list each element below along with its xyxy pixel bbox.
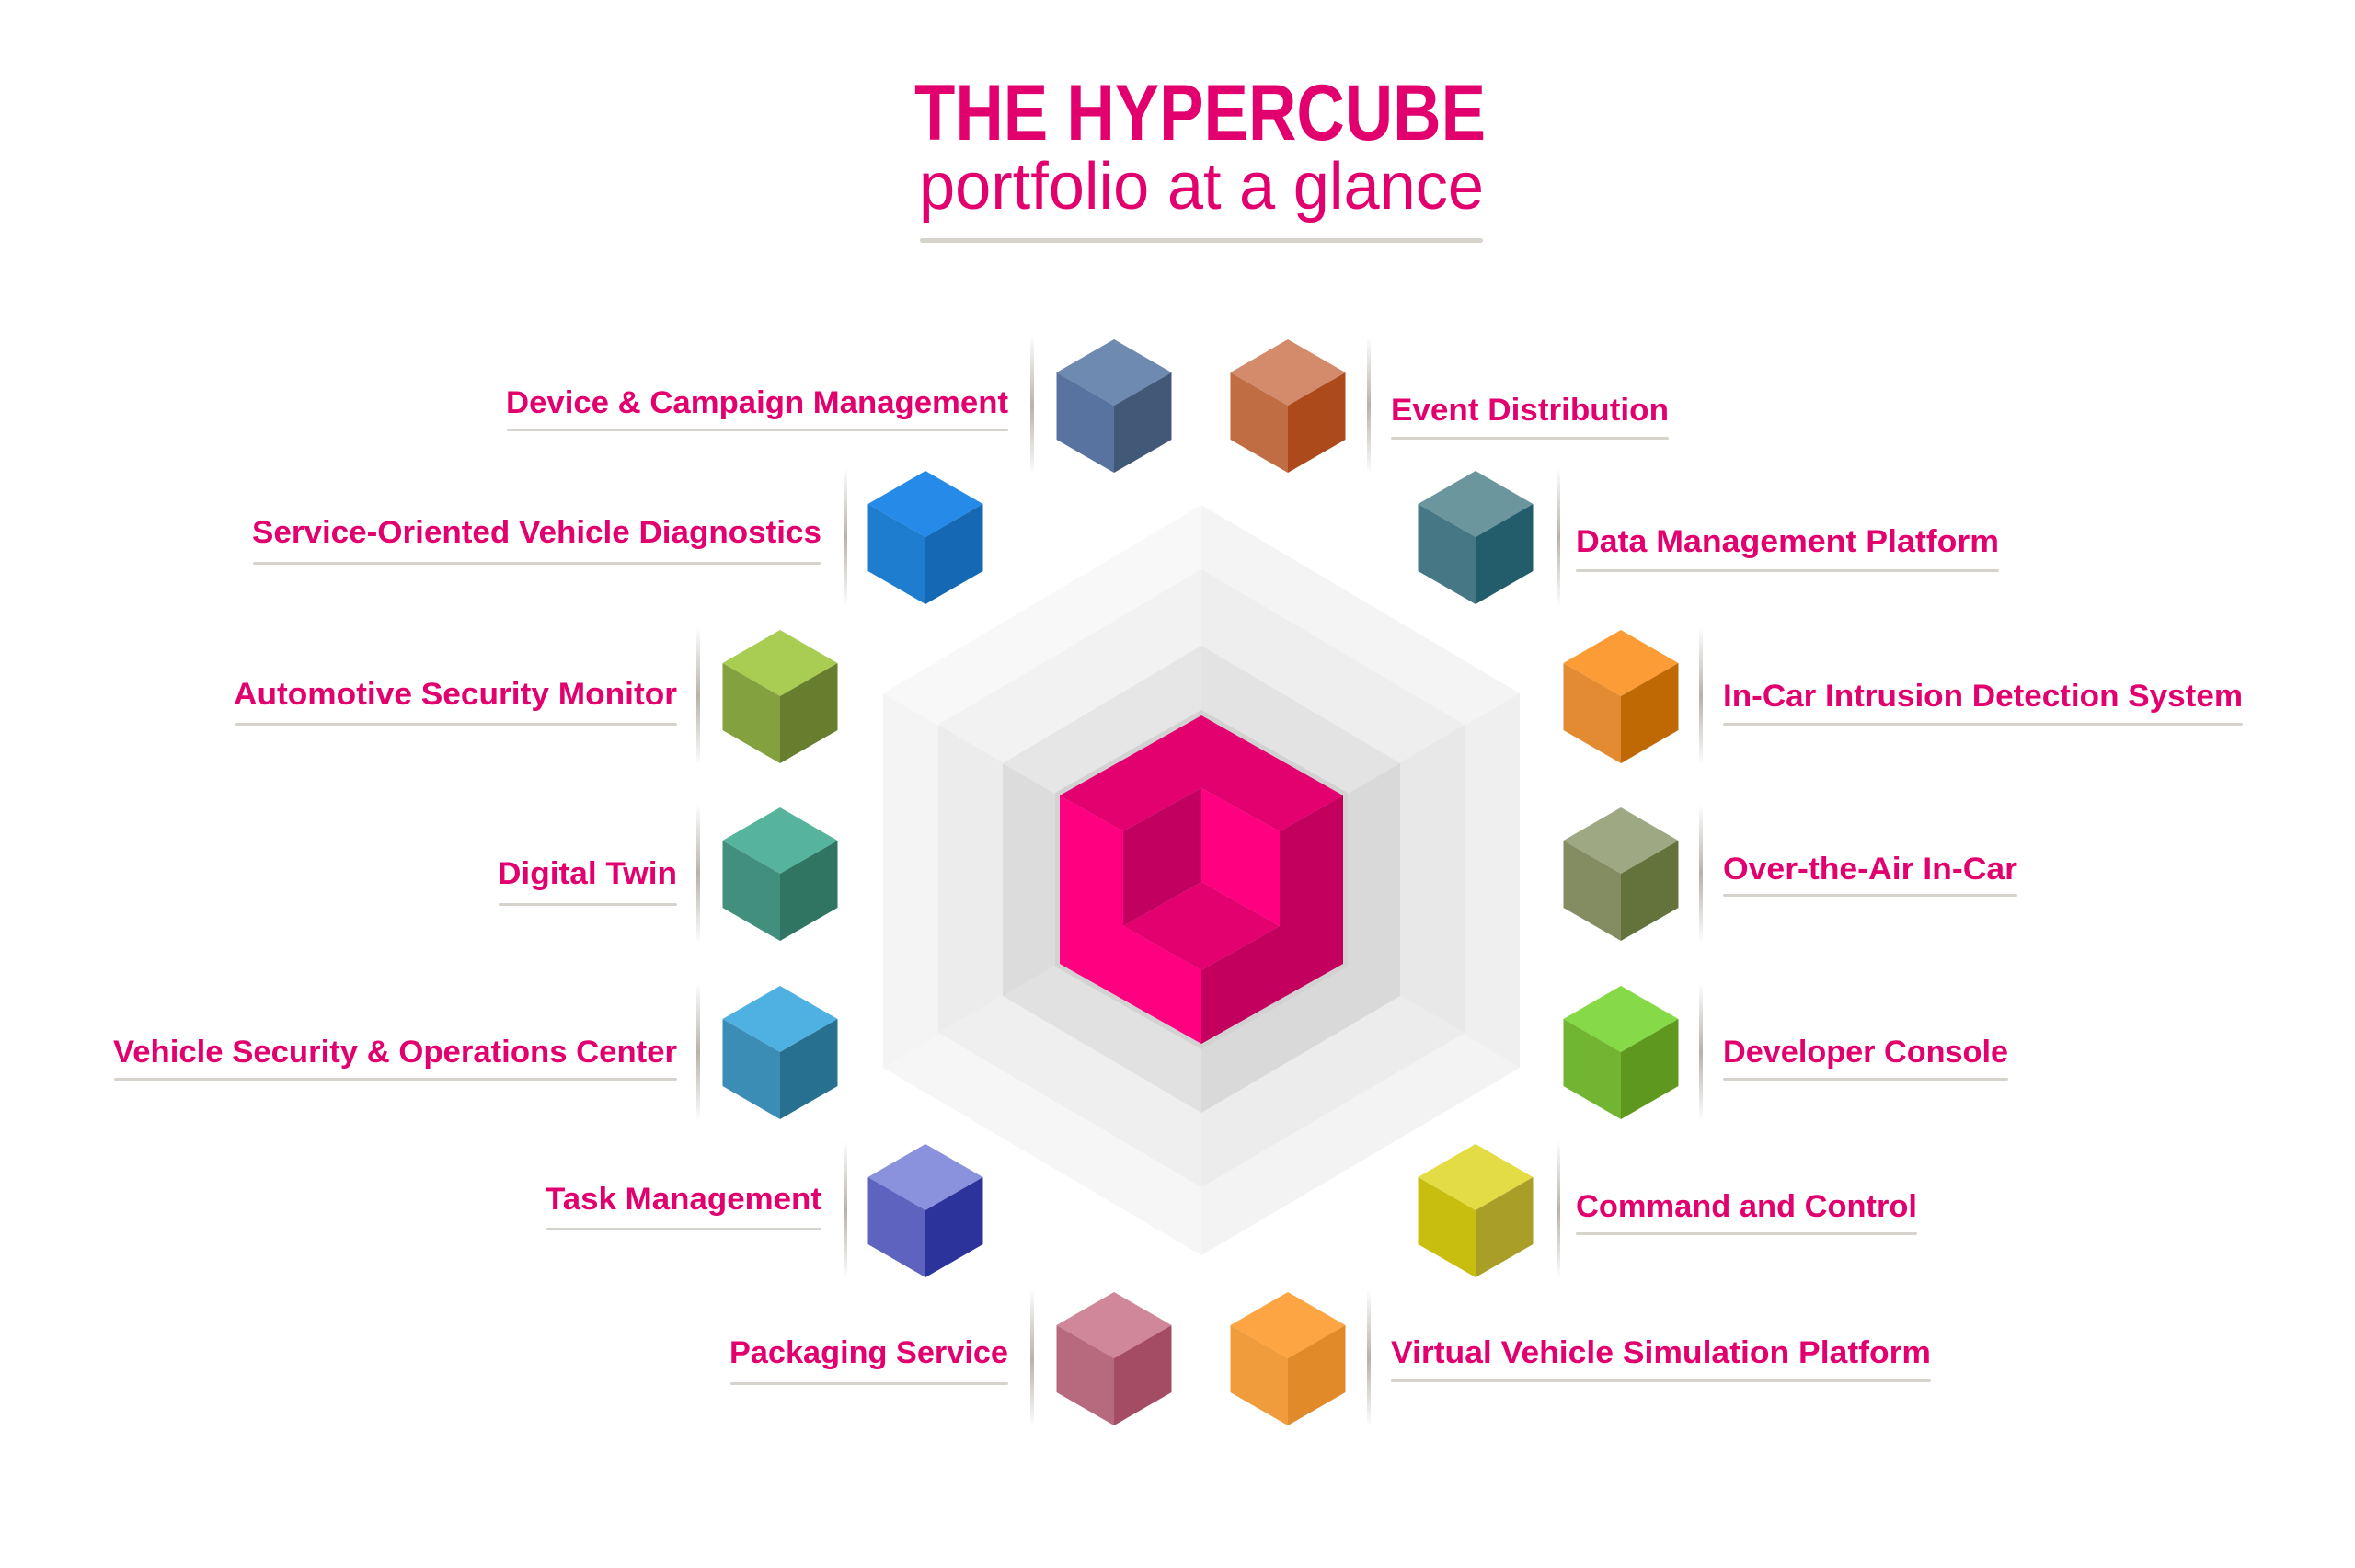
cube: Vehicle Security & Operations Center xyxy=(723,986,837,1119)
label: Automotive Security Monitor xyxy=(234,677,677,726)
label: Digital Twin xyxy=(498,856,677,906)
title: THE HYPERCUBE xyxy=(914,69,1486,157)
cube: In-Car Intrusion Detection System xyxy=(1564,630,1678,763)
label: Data Management Platform: Data Management Platform xyxy=(1576,524,1999,559)
label: Service-Oriented Vehicle Diagnostics: Service-Oriented Vehicle Diagnostics xyxy=(252,515,821,550)
cube: Command and Control xyxy=(1419,1144,1533,1277)
central hexagon layers xyxy=(883,505,1520,1255)
label: Event Distribution: Event Distribution xyxy=(1391,393,1669,428)
label: Command and Control: Command and Control xyxy=(1576,1189,1917,1224)
label: Over-the-Air In-Car: Over-the-Air In-Car xyxy=(1723,852,2017,887)
cube: Automotive Security Monitor xyxy=(723,630,837,763)
label: Device & Campaign Management: Device & Campaign Management xyxy=(506,385,1008,420)
cube: Service-Oriented Vehicle Diagnostics xyxy=(868,471,982,604)
cube: Developer Console xyxy=(1564,986,1678,1119)
dividers xyxy=(696,337,1703,1427)
cube: Event Distribution xyxy=(1231,339,1345,473)
label: Data Management Platform xyxy=(1576,524,1999,572)
label: Automotive Security Monitor: Automotive Security Monitor xyxy=(234,677,677,712)
cube: Packaging Service xyxy=(1056,1292,1172,1425)
label: Digital Twin: Digital Twin xyxy=(498,856,677,891)
label: Service-Oriented Vehicle Diagnostics xyxy=(252,515,821,565)
label: Virtual Vehicle Simulation Platform: Virtual Vehicle Simulation Platform xyxy=(1391,1335,1931,1370)
cube: Over-the-Air In-Car xyxy=(1564,807,1678,941)
central pink cube xyxy=(1060,715,1343,1044)
cube: Data Management Platform xyxy=(1419,471,1533,604)
label: Task Management xyxy=(546,1182,821,1230)
label: Developer Console: Developer Console xyxy=(1723,1035,2008,1070)
cube: Task Management xyxy=(868,1144,982,1277)
label: Packaging Service xyxy=(729,1335,1008,1385)
cube: Digital Twin xyxy=(723,807,837,941)
label: In-Car Intrusion Detection System: In-Car Intrusion Detection System xyxy=(1723,679,2243,714)
label: Packaging Service: Packaging Service xyxy=(729,1335,1008,1370)
title: portfolio at a glance xyxy=(919,150,1484,223)
cube: Device & Campaign Management xyxy=(1056,339,1172,473)
cube: Virtual Vehicle Simulation Platform xyxy=(1231,1292,1345,1425)
label: Vehicle Security & Operations Center: Vehicle Security & Operations Center xyxy=(113,1035,677,1070)
label: Task Management: Task Management xyxy=(546,1182,821,1217)
title xyxy=(914,69,1486,243)
